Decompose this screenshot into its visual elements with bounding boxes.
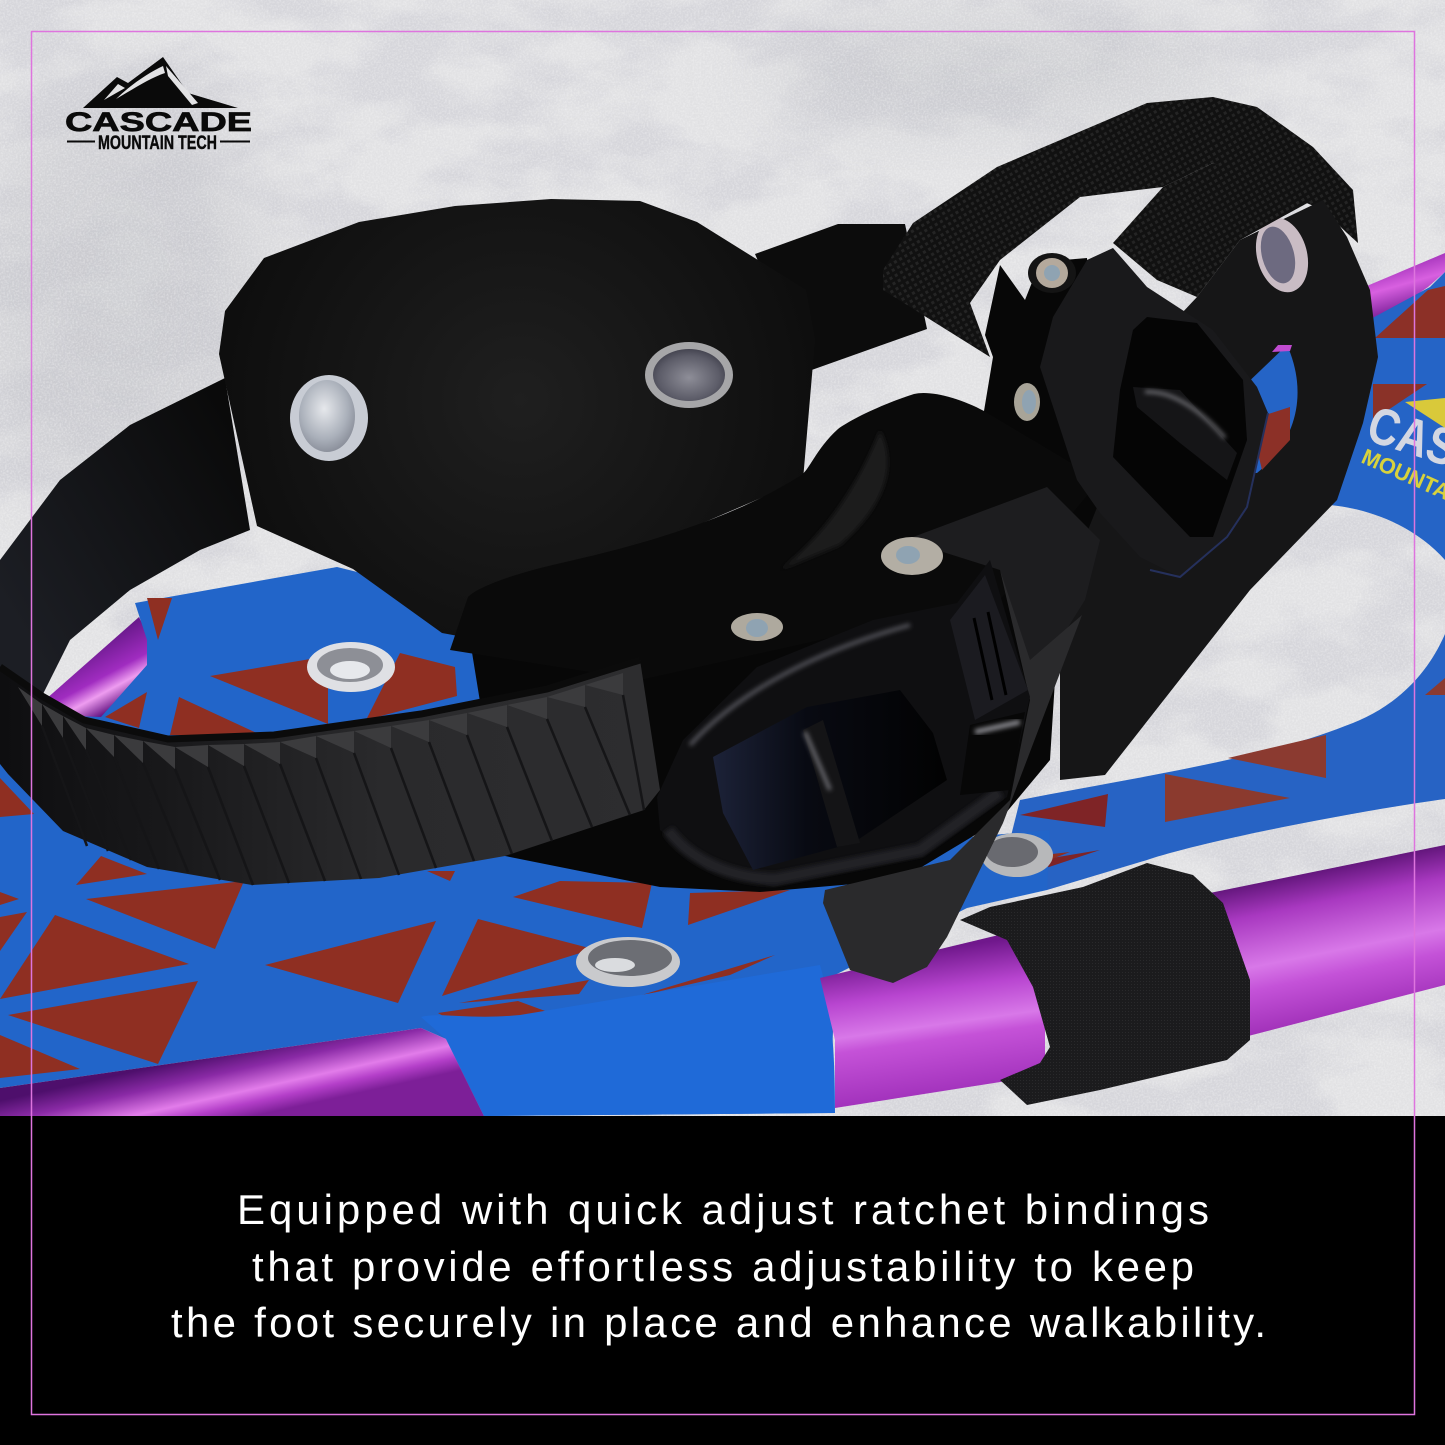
washer lower <box>1014 383 1040 421</box>
ratchet tooth edges <box>42 695 644 885</box>
rivet right on pad <box>645 342 733 408</box>
lever plate of lower buckle <box>905 487 1100 670</box>
logo tagline: MOUNTAIN TECH <box>98 133 217 154</box>
silver rivets <box>290 342 1053 987</box>
lever tongue <box>823 570 1082 983</box>
leather heel pad <box>219 199 815 640</box>
caption text: Equipped with quick adjust ratchet bindings <box>237 1186 1209 1233</box>
lower left purple tube <box>0 1028 484 1116</box>
shiny cradle <box>450 393 1100 680</box>
logo wordmark: CASCADE <box>65 107 252 137</box>
dark base under buckles <box>470 258 1100 892</box>
right heel plate <box>1060 200 1378 780</box>
caption text: that provide effortless adjustability to keep <box>252 1243 1194 1290</box>
nylon webbing strap rear layer <box>1113 163 1313 297</box>
blue decking strip on right <box>1000 634 1445 890</box>
ratchet teeth <box>18 673 623 769</box>
left purple tube <box>45 617 160 730</box>
rivet on deck <box>307 642 395 692</box>
rivet lower deck <box>576 937 680 987</box>
blue wrap band around tube <box>421 965 835 1116</box>
right purple tube section <box>1200 845 1445 1042</box>
caption text <box>171 1186 1266 1346</box>
bottom black panel <box>0 1116 1445 1445</box>
logo: Cascade Mountain Tech <box>65 57 252 154</box>
middle purple tube section <box>820 933 1045 1108</box>
rivet left on pad <box>290 375 368 461</box>
nylon webbing strap front <box>883 97 1358 357</box>
washer top <box>1028 253 1076 293</box>
rear strap loop <box>0 378 250 696</box>
main blue deck with triangles <box>0 567 1070 1116</box>
lower buckle <box>657 537 1030 887</box>
rear arc of strap <box>755 224 927 372</box>
rivet on heel plate <box>1248 212 1316 298</box>
washer on cradle <box>731 613 783 641</box>
snow background <box>0 0 1445 1120</box>
ratchet strap <box>0 660 660 885</box>
upper buckle <box>1014 248 1268 577</box>
right blue deck with printed logo <box>1330 272 1445 560</box>
washer on lever <box>881 537 943 575</box>
logo mountain <box>83 57 238 108</box>
velcro keeper loop <box>960 863 1250 1105</box>
top right purple tube <box>1362 253 1445 326</box>
rivet under lever <box>981 833 1053 877</box>
caption text: the foot securely in place and enhance walkability. <box>171 1299 1266 1346</box>
